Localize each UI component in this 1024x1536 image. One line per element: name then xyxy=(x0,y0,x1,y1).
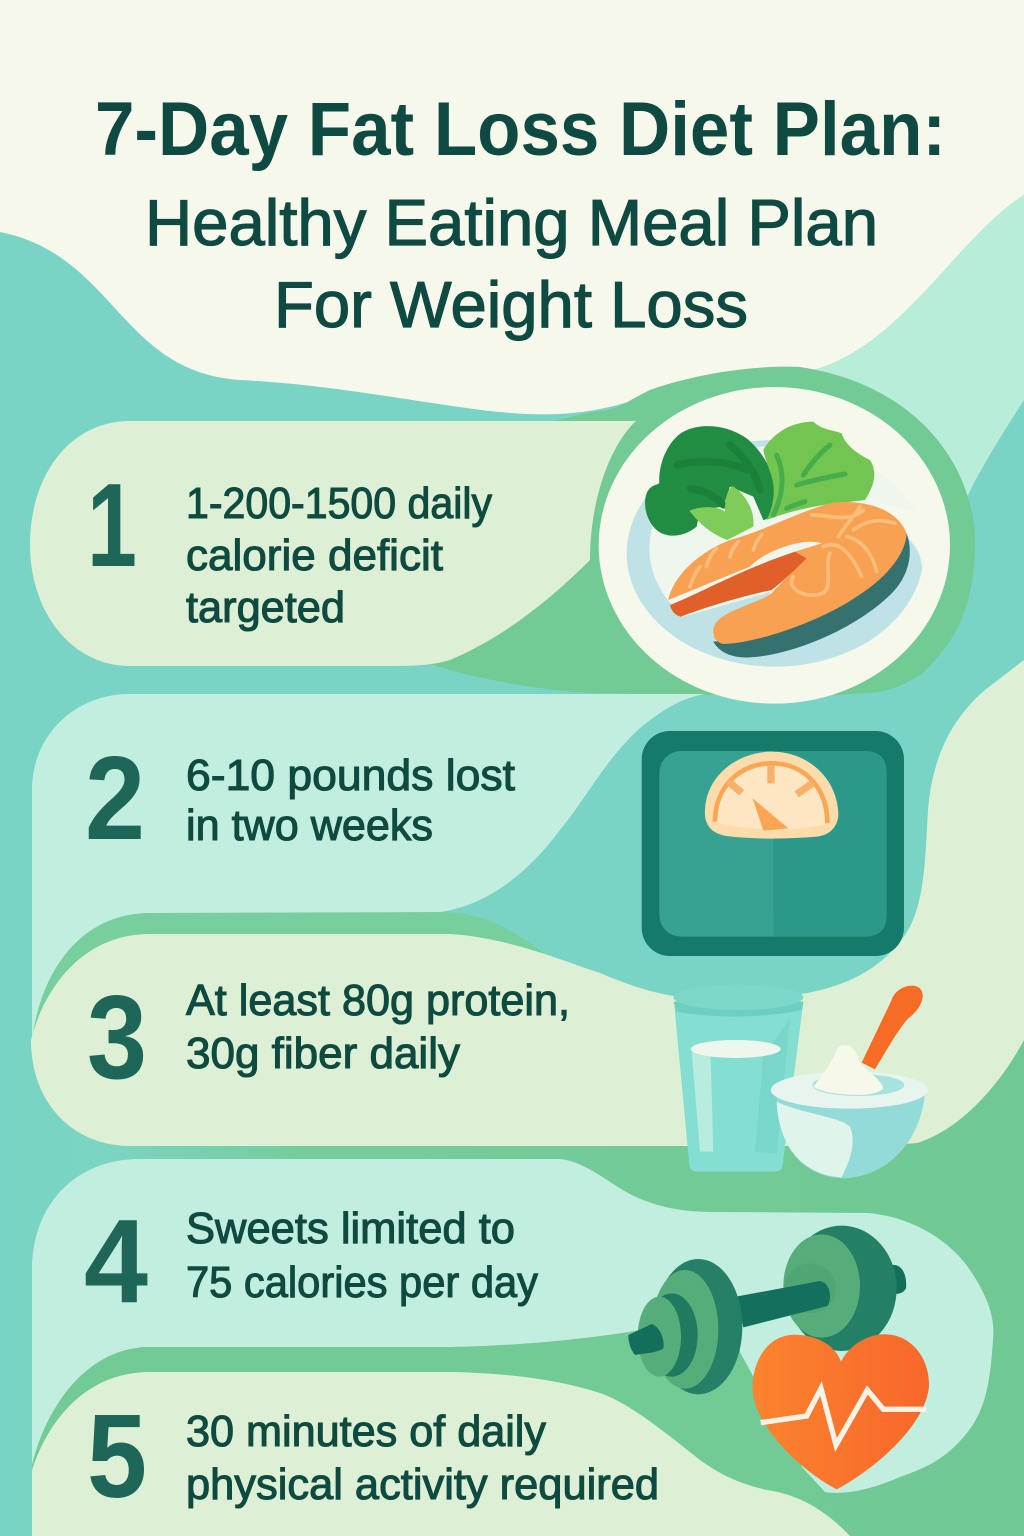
panel: step 2 pounds lost xyxy=(32,694,705,1040)
number 3: 3 xyxy=(87,971,147,1104)
icon: bathroom scale xyxy=(642,731,904,956)
green band above panel xyxy=(32,912,560,1040)
salmon skin xyxy=(713,533,910,657)
text: calorie deficit: 1-200-1500 daily xyxy=(186,479,492,528)
text: pounds lost: 6-10 pounds lost xyxy=(186,751,515,800)
panel shape xyxy=(30,421,636,666)
title line 3: For Weight Loss xyxy=(274,268,748,341)
left end stub xyxy=(628,1324,664,1355)
salmon flesh xyxy=(668,502,907,644)
panel shape xyxy=(32,694,705,1040)
dark lettuce xyxy=(645,426,774,536)
icon: heart with pulse line xyxy=(753,1334,929,1489)
left weight xyxy=(654,1259,742,1394)
number 5: 5 xyxy=(87,1390,147,1523)
scale dial xyxy=(705,752,838,839)
pulse line xyxy=(761,1388,926,1445)
right end stub xyxy=(892,1265,906,1294)
text: pounds lost xyxy=(186,751,515,850)
background: upper right mint wave xyxy=(780,195,1024,520)
panel: step 5 physical activity xyxy=(32,1330,850,1536)
number 4: 4 xyxy=(84,1195,148,1328)
text: calorie deficit: targeted xyxy=(186,583,345,632)
icon: plate with salmon and greens xyxy=(599,387,950,704)
panel: step 3 protein and fiber xyxy=(31,660,1024,1146)
light lettuce xyxy=(763,422,874,520)
text: physical activity: 30 minutes of daily xyxy=(186,1407,546,1456)
text: protein and fiber: 30g fiber daily xyxy=(186,1029,460,1078)
green band above panel xyxy=(32,1330,850,1536)
yogurt xyxy=(813,1045,883,1095)
background: cream header wave xyxy=(0,0,1024,414)
scale body xyxy=(642,731,904,956)
text: physical activity: physical activity required xyxy=(186,1460,659,1509)
text: protein and fiber xyxy=(186,976,570,1078)
text: calorie deficit xyxy=(186,479,492,632)
text: sweets limit xyxy=(186,1204,538,1307)
icon: glass of water and yogurt bowl xyxy=(673,985,928,1178)
salmon dark cut xyxy=(670,552,807,617)
panel shape xyxy=(32,1159,993,1500)
bowl xyxy=(771,986,928,1178)
title line 2: Healthy Eating Meal Plan xyxy=(145,186,878,259)
bar xyxy=(736,1281,830,1327)
panel: step 1 calorie deficit xyxy=(30,367,975,695)
text: pounds lost: in two weeks xyxy=(186,801,433,850)
panel shape xyxy=(32,1372,850,1536)
panel shape xyxy=(31,660,1024,1146)
text: physical activity xyxy=(186,1407,659,1509)
title xyxy=(95,87,946,341)
panel: step 4 sweets limit xyxy=(32,1159,993,1500)
title line 1: 7-Day Fat Loss Diet Plan: xyxy=(95,87,946,172)
plate xyxy=(599,387,950,704)
background: lower green field xyxy=(0,1040,1024,1536)
text: protein and fiber: At least 80g protein, xyxy=(186,976,570,1025)
shadow below salmon cut xyxy=(681,592,772,642)
text: sweets limit: Sweets limited to xyxy=(186,1204,515,1253)
plate rim shadow xyxy=(627,440,923,667)
dark lettuce veins xyxy=(677,445,760,505)
text: calorie deficit: calorie deficit xyxy=(186,531,443,580)
spoon xyxy=(862,986,923,1069)
text: sweets limit: 75 calories per day xyxy=(186,1258,538,1307)
glass xyxy=(673,985,803,1172)
salmon ribs xyxy=(690,507,895,595)
light lettuce veins xyxy=(773,445,845,515)
green backing blob behind plate xyxy=(430,367,975,695)
small sprig xyxy=(689,486,754,540)
number 2: 2 xyxy=(85,732,145,865)
number 1: 1 xyxy=(87,459,137,592)
icon: dumbbell xyxy=(628,1226,906,1394)
right weight xyxy=(787,1226,897,1351)
heart xyxy=(753,1334,929,1489)
